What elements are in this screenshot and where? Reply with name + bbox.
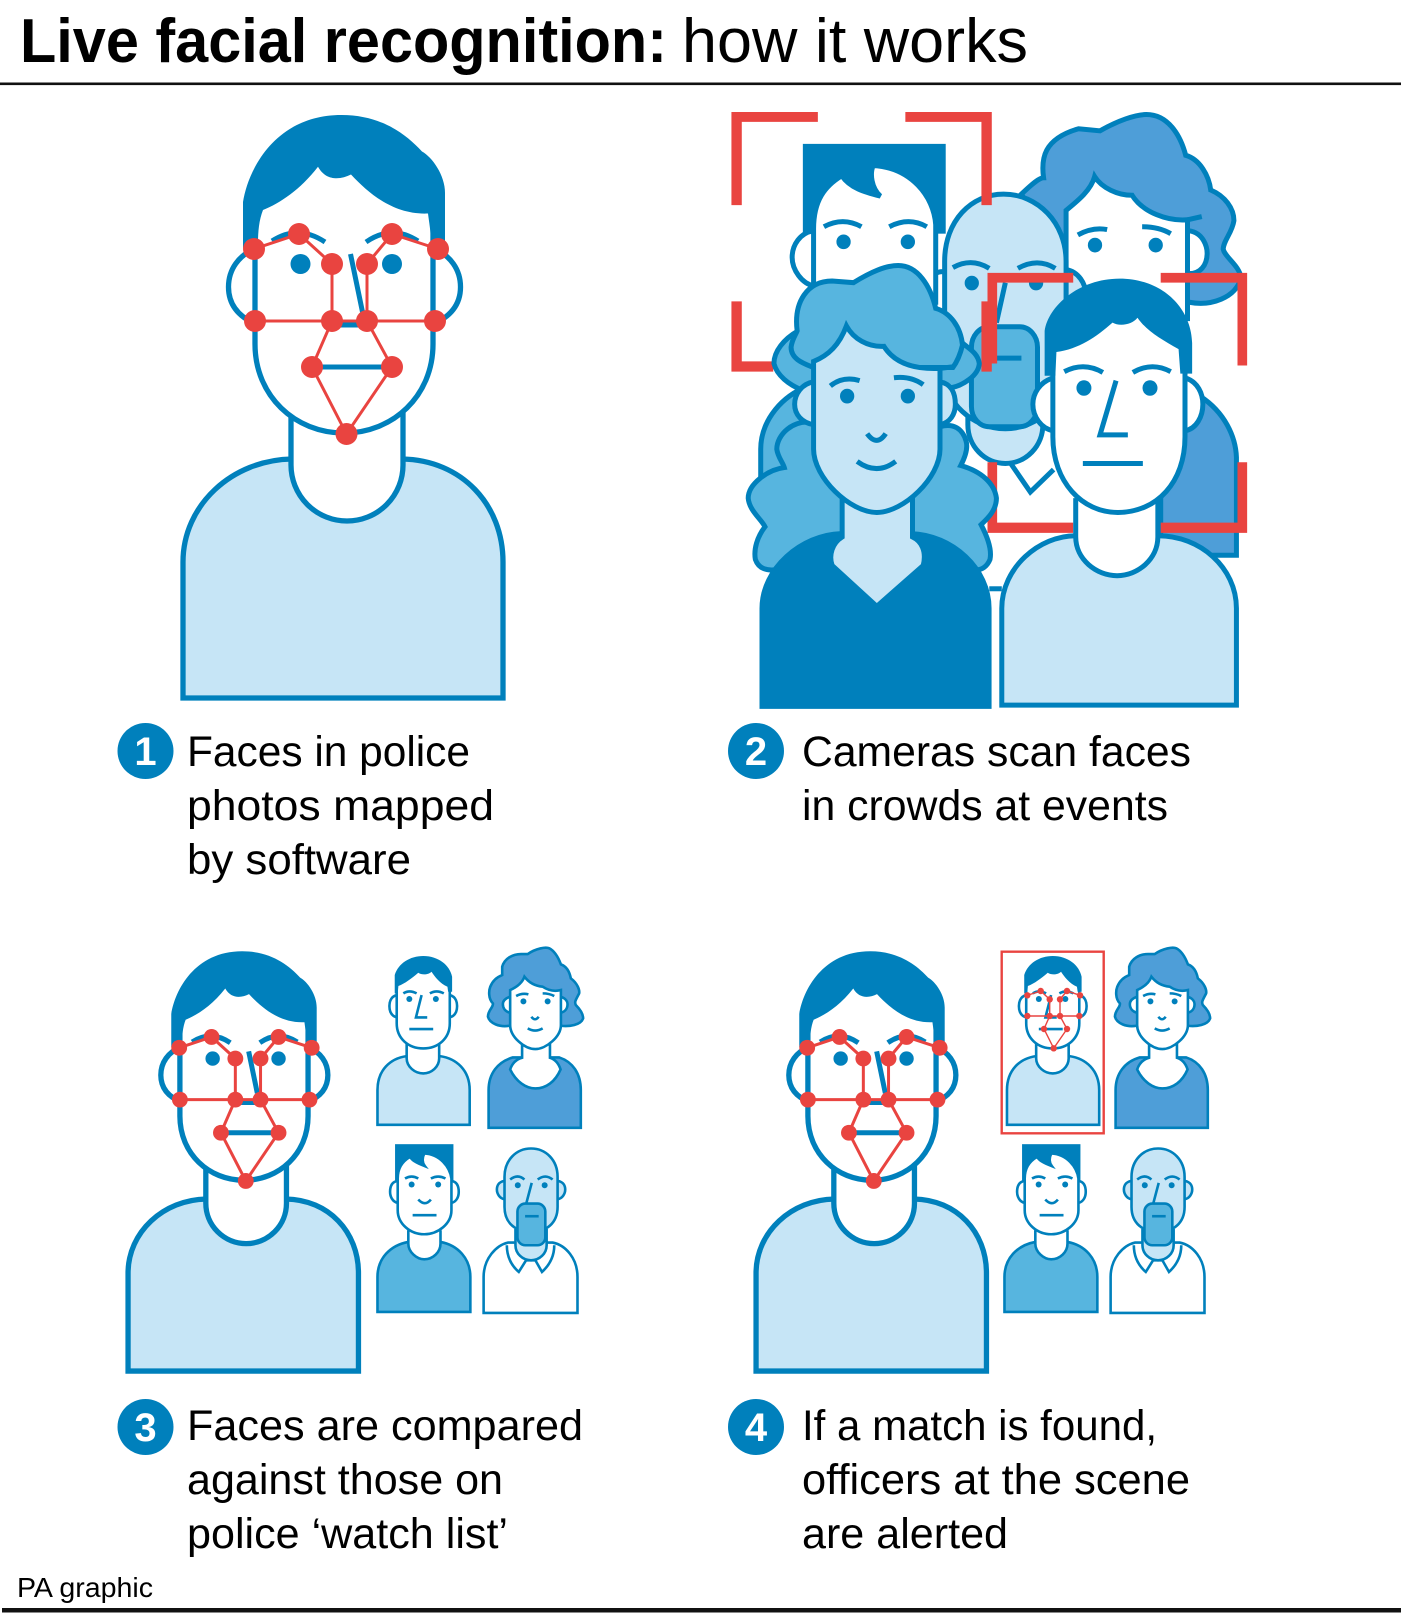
person D	[484, 1149, 577, 1313]
title: Live facial recognition:	[20, 7, 667, 76]
camera bracket: first face	[731, 112, 992, 372]
step 1 caption: Faces in police	[187, 728, 470, 776]
panel: step 4 match found	[728, 948, 1210, 1558]
step 4 caption: If a match is found,	[802, 1402, 1157, 1450]
credit: PA graphic	[17, 1572, 153, 1603]
person: bald man with beard	[945, 194, 1086, 589]
step 4 caption	[728, 1399, 1190, 1558]
step 2 caption: Cameras scan faces	[802, 728, 1191, 776]
step 3 caption: Faces are compared	[187, 1402, 583, 1450]
illustration: mapped face	[756, 951, 986, 1371]
illustration: crowd with camera brackets	[731, 112, 1247, 708]
person A	[377, 956, 470, 1125]
step 3 caption: against those on	[187, 1456, 503, 1504]
step 2 caption: in crowds at events	[802, 782, 1168, 830]
step 3 caption: 3	[134, 1406, 157, 1450]
step 2 caption: 2	[745, 730, 767, 774]
panel: step 2 crowd scan	[728, 112, 1247, 830]
panel: step 1 mapped face	[118, 115, 503, 884]
matched face	[1002, 952, 1104, 1133]
step 1 caption	[118, 723, 494, 884]
person: front woman	[748, 266, 996, 708]
step 4 caption: are alerted	[802, 1510, 1008, 1558]
face map points	[243, 223, 449, 445]
title	[20, 7, 1028, 76]
watch list faces	[1004, 948, 1210, 1313]
step 1 caption: photos mapped	[187, 782, 494, 830]
illustration: mapped face	[128, 951, 358, 1371]
step 1 caption: by software	[187, 836, 411, 884]
step 2 caption	[728, 723, 1191, 830]
step 3 caption: police ‘watch list’	[187, 1510, 508, 1558]
person: front man	[1002, 279, 1236, 705]
step 4 caption: 4	[745, 1406, 768, 1450]
title: how it works	[682, 7, 1028, 76]
camera bracket: second face	[987, 273, 1247, 533]
person C	[377, 1144, 470, 1312]
person B	[488, 948, 583, 1128]
illustration: man with face map	[183, 115, 503, 698]
watch list faces	[377, 948, 583, 1313]
person: back woman with curls	[1021, 114, 1241, 555]
step 4 caption: officers at the scene	[802, 1456, 1190, 1504]
panel: step 3 compare with watch list	[118, 948, 583, 1558]
person: back man with dark hair	[761, 144, 946, 498]
step 3 caption	[118, 1399, 583, 1558]
step 1 caption: 1	[134, 730, 157, 774]
